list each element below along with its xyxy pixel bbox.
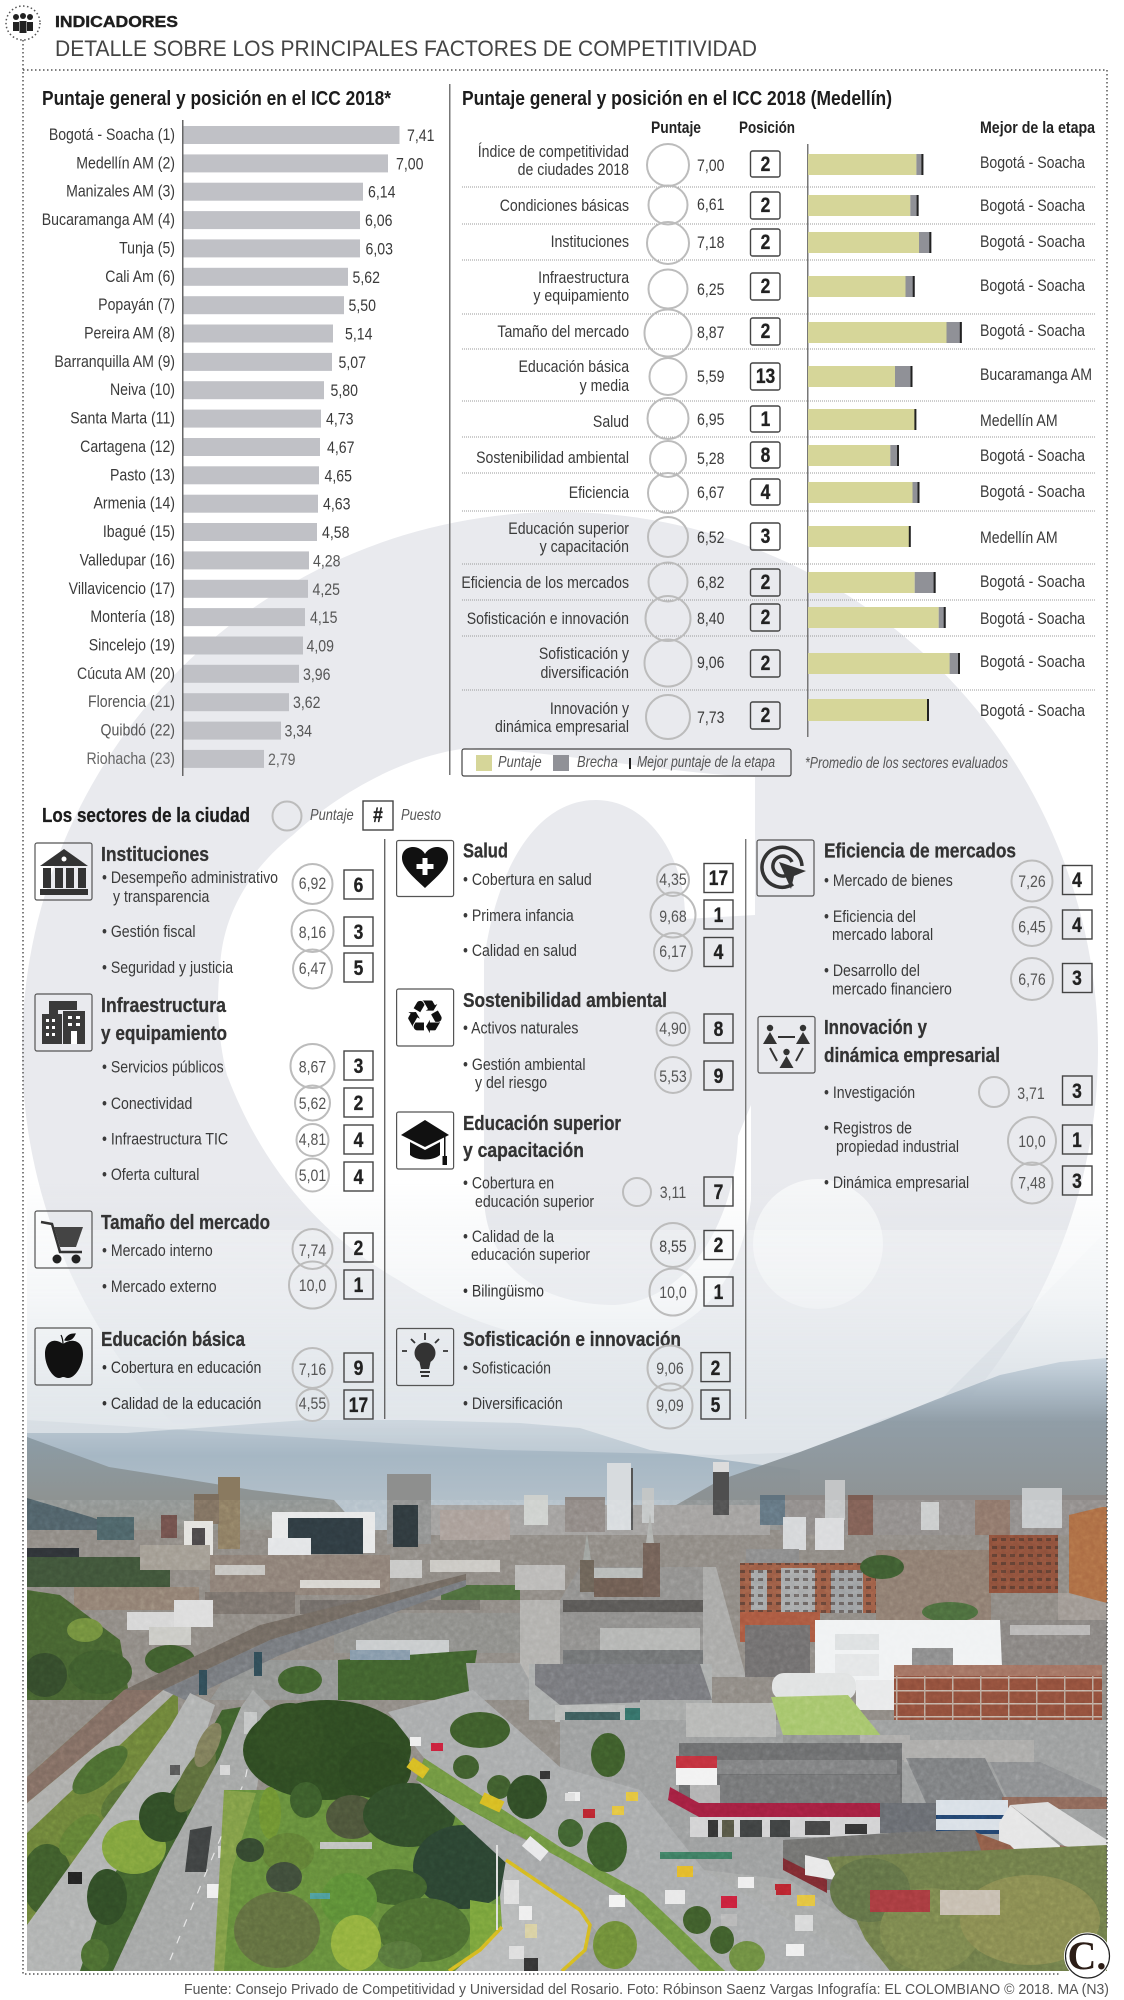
city labels: Valledupar (16) (80, 551, 175, 570)
panel: Educación superior: 8,55 (659, 1238, 687, 1256)
row: Sostenibilidad ambiental (476, 441, 1085, 477)
row: Instituciones: 2 (761, 232, 770, 254)
icon: graduation cap (397, 1112, 454, 1169)
panel: Sofisticación e innovación: 9,09 (656, 1397, 684, 1415)
column headers: Mejor de la etapa (980, 118, 1095, 137)
panel: Infraestructura y equipamiento: 4,81 (299, 1131, 326, 1149)
icon: people in dotted circle (6, 6, 40, 40)
logo: C. badge: C. (1068, 1933, 1106, 1978)
heading: Puntaje general y posición en el ICC 2018* (42, 88, 391, 110)
panel: Instituciones: • Desempeño administrativo (102, 868, 278, 887)
panel: Innovación y dinámica empresarial: 3 (1072, 1081, 1082, 1103)
column headers (651, 118, 1095, 137)
icon: connected people (758, 1016, 815, 1073)
panel: Instituciones: • Gestión fiscal (102, 923, 195, 941)
row: Condiciones básicas: Condiciones básicas (500, 197, 629, 215)
divider column 2-3 (745, 839, 746, 1419)
panel: Educación superior: 7 (714, 1182, 723, 1204)
row: Eficiencia: 4 (761, 482, 771, 504)
row: Innovación y dinámica empresarial: Bogotá - Soacha (980, 702, 1085, 720)
key: score circle (272, 802, 354, 830)
city labels: Medellín AM (2) (76, 154, 175, 173)
panel: Instituciones: • Seguridad y justicia (102, 959, 233, 977)
icon: temple (35, 843, 92, 900)
panel: Sostenibilidad ambiental: • Activos naturales (463, 1019, 579, 1038)
panel: Sostenibilidad ambiental: 5,53 (659, 1068, 687, 1086)
panel: Eficiencia de mercados: 6,76 (1018, 971, 1046, 989)
row: Índice de competitividad: Índice de competitividad (478, 141, 629, 161)
heading: Tamaño del mercado (101, 1211, 270, 1234)
row: Eficiencia de los mercados (461, 562, 1085, 602)
city labels: Bogotá - Soacha (1) (49, 126, 175, 144)
values (268, 127, 434, 769)
panel: Sostenibilidad ambiental: • Gestión ambiental (463, 1056, 585, 1074)
city labels: Villavicencio (17) (69, 580, 175, 598)
panel: Instituciones: 5 (354, 958, 364, 980)
panel: Eficiencia de mercados: 3 (1072, 968, 1082, 990)
panel: Instituciones (35, 843, 373, 988)
row: Índice de competitividad: de ciudades 2018 (518, 161, 629, 179)
panel: Eficiencia de mercados: 4 (1072, 870, 1082, 892)
city labels: Florencia (21) (88, 693, 175, 712)
row: Índice de competitividad (478, 141, 1085, 186)
panel: Educación superior: 2 (714, 1235, 723, 1257)
section heading: sectors with key (42, 801, 441, 830)
heading: Salud (463, 840, 508, 862)
panel: Educación superior: 10,0 (659, 1284, 687, 1302)
legend: Brecha (577, 754, 618, 771)
panel: Sofisticación e innovación: 2 (711, 1358, 720, 1380)
heading: Educación básica (101, 1328, 245, 1351)
row: Eficiencia de los mercados: Eficiencia de los mercados (461, 574, 629, 592)
panel: Tamaño del mercado: 1 (354, 1275, 364, 1297)
panel: Innovación y dinámica empresarial: • Investigación (824, 1084, 915, 1102)
row: Tamaño del mercado: Tamaño del mercado (497, 323, 629, 341)
panel: Innovación y dinámica empresarial: propiedad industrial (836, 1138, 959, 1156)
values: 3,96 (303, 666, 330, 684)
section tag: INDICADORES (55, 14, 178, 31)
row: Sofisticación y diversificación (539, 640, 1085, 686)
panel: Educación básica: • Calidad de la educación (102, 1395, 261, 1413)
panel: Instituciones: 6 (354, 875, 364, 897)
panel: Instituciones: y transparencia (113, 888, 210, 906)
panel: Infraestructura y equipamiento: • Servicios públicos (102, 1058, 224, 1077)
row: Eficiencia: 6,67 (697, 484, 724, 502)
panel: Eficiencia de mercados: 4 (1072, 915, 1082, 937)
values: 2,79 (268, 751, 295, 769)
row: Tamaño del mercado (497, 310, 1085, 356)
row: Instituciones (551, 222, 1085, 264)
panel: Sostenibilidad ambiental: 8 (714, 1019, 724, 1041)
row: Innovación y dinámica empresarial: 2 (761, 705, 770, 727)
city labels: Cali Am (6) (105, 268, 175, 286)
row: Tamaño del mercado: 2 (761, 321, 770, 343)
panel: Educación superior: y capacitación (463, 1139, 584, 1162)
row: Infraestructura: Infraestructura (538, 269, 629, 287)
row: Educación básica: y media (580, 377, 629, 395)
panel: Eficiencia de mercados: • Desarrollo del (824, 962, 920, 980)
panel: Innovación y dinámica empresarial: 1 (1072, 1130, 1082, 1152)
row: Educación superior: Educación superior (508, 520, 629, 538)
row: Condiciones básicas: 2 (761, 195, 770, 217)
values: 4,25 (312, 581, 340, 599)
panel: Salud: 1 (714, 905, 724, 927)
heading: Sofisticación e innovación (463, 1328, 681, 1351)
panel: Infraestructura y equipamiento: 2 (354, 1093, 363, 1115)
row: Sofisticación e innovación: Bogotá - Soacha (980, 610, 1085, 628)
background: giant C. logo watermark (22, 512, 1098, 1588)
row: Educación básica: Bucaramanga AM (980, 366, 1092, 384)
row: Educación básica (519, 358, 1092, 395)
city labels: Manizales AM (3) (66, 183, 175, 201)
panel: Educación básica: 17 (349, 1395, 368, 1417)
row: Sostenibilidad ambiental: Bogotá - Soacha (980, 447, 1085, 465)
legend: Mejor puntaje de la etapa (637, 754, 775, 771)
row: Salud: Salud (593, 413, 629, 431)
heading: Instituciones (101, 843, 209, 866)
panel: Infraestructura y equipamiento: 3 (354, 1056, 364, 1078)
panel: Salud: • Cobertura en salud (463, 871, 592, 889)
panel: Eficiencia de mercados: 7,26 (1018, 873, 1046, 891)
row: Índice de competitividad: 2 (761, 154, 770, 176)
legend: Puntaje (498, 754, 542, 771)
panel: Educación superior: 1 (714, 1282, 724, 1304)
icon: recycle (397, 989, 454, 1046)
photo: aerial view of Medellín (22, 1180, 1107, 1973)
values: 7,00 (396, 155, 424, 174)
row: Sofisticación y diversificación: 9,06 (697, 654, 724, 672)
panel: Sofisticación e innovación (397, 1328, 730, 1428)
icon: target with cursor (757, 840, 814, 896)
panel: Salud: 6,17 (659, 943, 687, 961)
row: Educación superior (508, 517, 1058, 557)
city labels: Montería (18) (90, 608, 175, 626)
panel: Tamaño del mercado: 10,0 (299, 1277, 327, 1295)
panel: Instituciones: 3 (354, 922, 364, 944)
city labels: Pereira AM (8) (84, 324, 175, 343)
values: 4,15 (310, 609, 338, 627)
panel: Educación básica: 4,55 (299, 1395, 327, 1413)
row: Eficiencia de los mercados: 2 (761, 572, 770, 594)
panel: Innovación y dinámica empresarial: 7,48 (1018, 1174, 1046, 1193)
panel: Infraestructura y equipamiento (35, 994, 373, 1192)
key: position box (363, 801, 441, 830)
city labels: Tunja (5) (119, 239, 175, 258)
row: Índice de competitividad: Bogotá - Soacha (980, 154, 1085, 172)
panel: Medellín scores table (461, 88, 1095, 776)
row: Salud: 6,95 (697, 411, 725, 429)
city labels: Popayán (7) (98, 296, 175, 315)
panel: Instituciones: 8,16 (299, 924, 326, 942)
panel: Educación básica: • Cobertura en educación (102, 1359, 261, 1377)
row: Educación superior: 6,52 (697, 529, 724, 547)
panel: Eficiencia de mercados: mercado laboral (832, 926, 933, 944)
vehicles (406, 1737, 815, 1971)
row: Eficiencia de los mercados: 6,82 (697, 574, 724, 592)
values: 3,34 (285, 722, 312, 741)
heading: Los sectores de la ciudad (42, 805, 250, 827)
values: 3,62 (293, 694, 320, 713)
icon: shopping cart (35, 1211, 92, 1268)
panel: Educación superior: educación superior (475, 1193, 594, 1211)
panel: Sostenibilidad ambiental (397, 989, 733, 1093)
key: score circle: Puntaje (310, 807, 354, 824)
panel: Educación superior: 3,11 (660, 1184, 686, 1202)
panel: Eficiencia de mercados: • Eficiencia del (824, 908, 916, 926)
row: Infraestructura: 2 (761, 276, 770, 298)
values: 5,80 (330, 382, 358, 401)
panel: Educación superior: • Cobertura en (463, 1174, 554, 1193)
panel: Sostenibilidad ambiental: y del riesgo (475, 1074, 547, 1092)
panel: Eficiencia de mercados: mercado financiero (832, 980, 952, 999)
icon: recycle: ♻ (404, 990, 446, 1044)
city labels: Bucaramanga AM (4) (42, 211, 175, 229)
row: Condiciones básicas: 6,61 (697, 196, 724, 214)
panel: Sofisticación e innovación: • Sofisticación (463, 1359, 551, 1378)
panel: Tamaño del mercado: 2 (354, 1238, 363, 1260)
panel: Infraestructura y equipamiento: 5,62 (299, 1095, 326, 1113)
values: 6,06 (365, 212, 392, 230)
row: Sostenibilidad ambiental: 8 (761, 445, 771, 467)
row: Sofisticación y diversificación: Sofisticación y (539, 645, 629, 663)
row: Innovación y dinámica empresarial: 7,73 (697, 709, 724, 727)
row: Instituciones: Bogotá - Soacha (980, 233, 1085, 251)
divider between top panels (449, 84, 450, 775)
panel: Educación superior: • Bilingüismo (463, 1282, 544, 1301)
panel: Salud: 4,35 (659, 871, 687, 889)
panel: Educación básica (35, 1328, 373, 1421)
values: 5,50 (348, 297, 376, 316)
panel: Instituciones: 6,92 (299, 875, 326, 893)
row separators (462, 187, 1095, 690)
panel: Sofisticación e innovación: 9,06 (656, 1360, 684, 1378)
values: 4,65 (325, 467, 352, 486)
legend (462, 749, 791, 776)
row: Innovación y dinámica empresarial: Innovación y (550, 700, 629, 718)
row: Condiciones básicas: Bogotá - Soacha (980, 197, 1085, 215)
row: Eficiencia: Bogotá - Soacha (980, 483, 1085, 501)
panel: Salud (397, 840, 733, 971)
row: Educación superior: Medellín AM (980, 529, 1058, 547)
values: 5,07 (339, 354, 366, 372)
row: Sofisticación y diversificación: Bogotá - Soacha (980, 653, 1085, 671)
icon: buildings (35, 994, 92, 1051)
city labels: Santa Marta (11) (70, 409, 175, 428)
row: Sostenibilidad ambiental: Sostenibilidad ambiental (476, 449, 629, 467)
panel: Infraestructura y equipamiento: • Conectividad (102, 1095, 192, 1113)
key: position box: Puesto (401, 807, 441, 824)
panel: Infraestructura y equipamiento: 5,01 (299, 1167, 326, 1185)
panel: Salud: • Calidad en salud (463, 942, 577, 960)
panel: Sostenibilidad ambiental: 4,90 (659, 1020, 687, 1038)
panel: Innovación y dinámica empresarial: 10,0 (1018, 1133, 1046, 1151)
panel: city ranking bar chart (42, 88, 434, 776)
row: Tamaño del mercado: 8,87 (697, 324, 724, 342)
panel: Infraestructura y equipamiento: • Oferta cultural (102, 1166, 199, 1184)
panel: Innovación y dinámica empresarial: • Registros de (824, 1119, 912, 1138)
row: Infraestructura: y equipamiento (533, 287, 629, 305)
city labels: Armenia (14) (93, 495, 175, 513)
heading: Innovación y (824, 1016, 927, 1039)
panel: Educación básica: 7,16 (299, 1361, 326, 1379)
icon: apple (35, 1328, 92, 1385)
values: 6,14 (368, 184, 396, 202)
panel: Sostenibilidad ambiental: 9 (714, 1066, 723, 1088)
panel: Innovación y dinámica empresarial (758, 1016, 1092, 1204)
city labels: Neiva (10) (110, 381, 175, 400)
row: Educación superior: 3 (761, 526, 771, 548)
row: Tamaño del mercado: Bogotá - Soacha (980, 322, 1085, 340)
city labels: Riohacha (23) (86, 750, 175, 768)
panel: Salud: 9,68 (659, 908, 687, 926)
row: Infraestructura (533, 269, 1085, 308)
heading: Sostenibilidad ambiental (463, 989, 667, 1012)
row: Sostenibilidad ambiental: 5,28 (697, 450, 724, 468)
row: Educación superior: y capacitación (540, 538, 629, 556)
icon: light bulb (397, 1328, 454, 1386)
city labels: Barranquilla AM (9) (54, 353, 175, 371)
row: Condiciones básicas (500, 186, 1085, 224)
values: 7,41 (407, 127, 434, 145)
panel: Instituciones: 6,47 (299, 960, 326, 978)
axis (182, 120, 184, 776)
panel: Sofisticación e innovación: 5 (711, 1395, 721, 1417)
values: 4,63 (323, 496, 350, 514)
heading: Puntaje general y posición en el ICC 2018 (Medellín) (462, 88, 892, 110)
values: 5,62 (353, 269, 380, 287)
row: Instituciones: 7,18 (697, 234, 724, 252)
row: Instituciones: Instituciones (551, 233, 629, 251)
panel: Infraestructura y equipamiento: 4 (354, 1167, 364, 1189)
panel: Tamaño del mercado: • Mercado interno (102, 1242, 213, 1260)
panel: Eficiencia de mercados (757, 840, 1092, 1000)
panel: Educación superior: • Calidad de la (463, 1228, 554, 1246)
panel: Infraestructura y equipamiento: 8,67 (299, 1058, 326, 1077)
row: Salud: 1 (761, 409, 771, 431)
icon: heart with cross (397, 840, 454, 896)
panel: Eficiencia de mercados: • Mercado de bienes (824, 872, 953, 890)
city labels: Ibagué (15) (103, 523, 175, 541)
row: Salud (593, 398, 1058, 439)
city labels: Cartagena (12) (80, 438, 175, 456)
row: Sofisticación e innovación (467, 596, 1085, 641)
panel: Tamaño del mercado: • Mercado externo (102, 1278, 217, 1296)
row: Infraestructura: 6,25 (697, 281, 725, 299)
bar axis (807, 144, 808, 737)
values: 5,14 (345, 325, 373, 344)
panel: Educación superior: educación superior (471, 1246, 590, 1264)
column headers: Puntaje (651, 118, 701, 137)
panel: Educación superior (397, 1112, 733, 1316)
column headers: Posición (739, 118, 795, 137)
panel: Salud: • Primera infancia (463, 907, 574, 925)
row: Sofisticación e innovación: Sofisticación e innovación (467, 610, 629, 628)
heading: Infraestructura (101, 994, 227, 1017)
bars (184, 126, 400, 768)
city labels: Sincelejo (19) (89, 636, 175, 655)
city labels: Quibdó (22) (101, 721, 175, 740)
city labels: Pasto (13) (110, 466, 175, 485)
panel: Innovación y dinámica empresarial: • Dinámica empresarial (824, 1174, 969, 1192)
row: Educación básica: 5,59 (697, 368, 724, 386)
row: Educación básica: 13 (756, 366, 775, 388)
panel: Infraestructura y equipamiento: 4 (354, 1130, 364, 1152)
row: Innovación y dinámica empresarial (495, 695, 1085, 739)
row: Educación básica: Educación básica (519, 358, 629, 376)
panel: Salud: 4 (714, 942, 724, 964)
values: 4,73 (326, 410, 353, 429)
row: Infraestructura: Bogotá - Soacha (980, 277, 1085, 295)
values: 4,58 (322, 524, 349, 542)
row: Sofisticación e innovación: 2 (761, 607, 770, 629)
row: Índice de competitividad: 7,00 (697, 157, 725, 175)
city labels: Cúcuta AM (20) (77, 665, 175, 683)
divider column 1-2 (384, 839, 385, 1419)
row: Salud: Medellín AM (980, 412, 1058, 430)
values: 4,09 (307, 637, 334, 656)
city labels (42, 126, 175, 768)
row: Sofisticación y diversificación: 2 (761, 653, 770, 675)
panel: Tamaño del mercado: 7,74 (299, 1242, 327, 1260)
values: 4,28 (313, 552, 340, 571)
panel: Infraestructura y equipamiento: • Infraestructura TIC (102, 1130, 228, 1149)
values: 6,03 (366, 240, 393, 259)
heading: Eficiencia de mercados (824, 840, 1016, 862)
row: Sofisticación e innovación: 8,40 (697, 610, 725, 628)
panel: Eficiencia de mercados: 6,45 (1018, 919, 1046, 937)
key: position box: # (373, 805, 383, 827)
panel: Educación básica: 9 (354, 1358, 363, 1380)
row: Sofisticación y diversificación: diversificación (540, 664, 629, 682)
row: Innovación y dinámica empresarial: dinámica empresarial (495, 718, 629, 736)
panel: Salud: 17 (709, 868, 728, 890)
footnote: *Promedio de los sectores evaluados (805, 755, 1008, 772)
panel: Innovación y dinámica empresarial: dinámica empresarial (824, 1044, 1000, 1067)
panel: Innovación y dinámica empresarial: 3 (1072, 1171, 1082, 1193)
row: Eficiencia: Eficiencia (569, 484, 629, 502)
panel: Infraestructura y equipamiento: y equipamiento (101, 1022, 227, 1045)
panel: Innovación y dinámica empresarial: 3,71 (1017, 1085, 1045, 1103)
panel: Sofisticación e innovación: • Diversificación (463, 1395, 563, 1413)
row: Eficiencia (569, 473, 1085, 513)
heading: Educación superior (463, 1112, 621, 1135)
title: DETALLE SOBRE LOS PRINCIPALES FACTORES DE COMPETITIVIDAD (55, 36, 757, 61)
row: Eficiencia de los mercados: Bogotá - Soacha (980, 573, 1085, 591)
panel: Tamaño del mercado (35, 1211, 373, 1308)
header (6, 6, 757, 61)
values: 4,67 (327, 439, 354, 457)
